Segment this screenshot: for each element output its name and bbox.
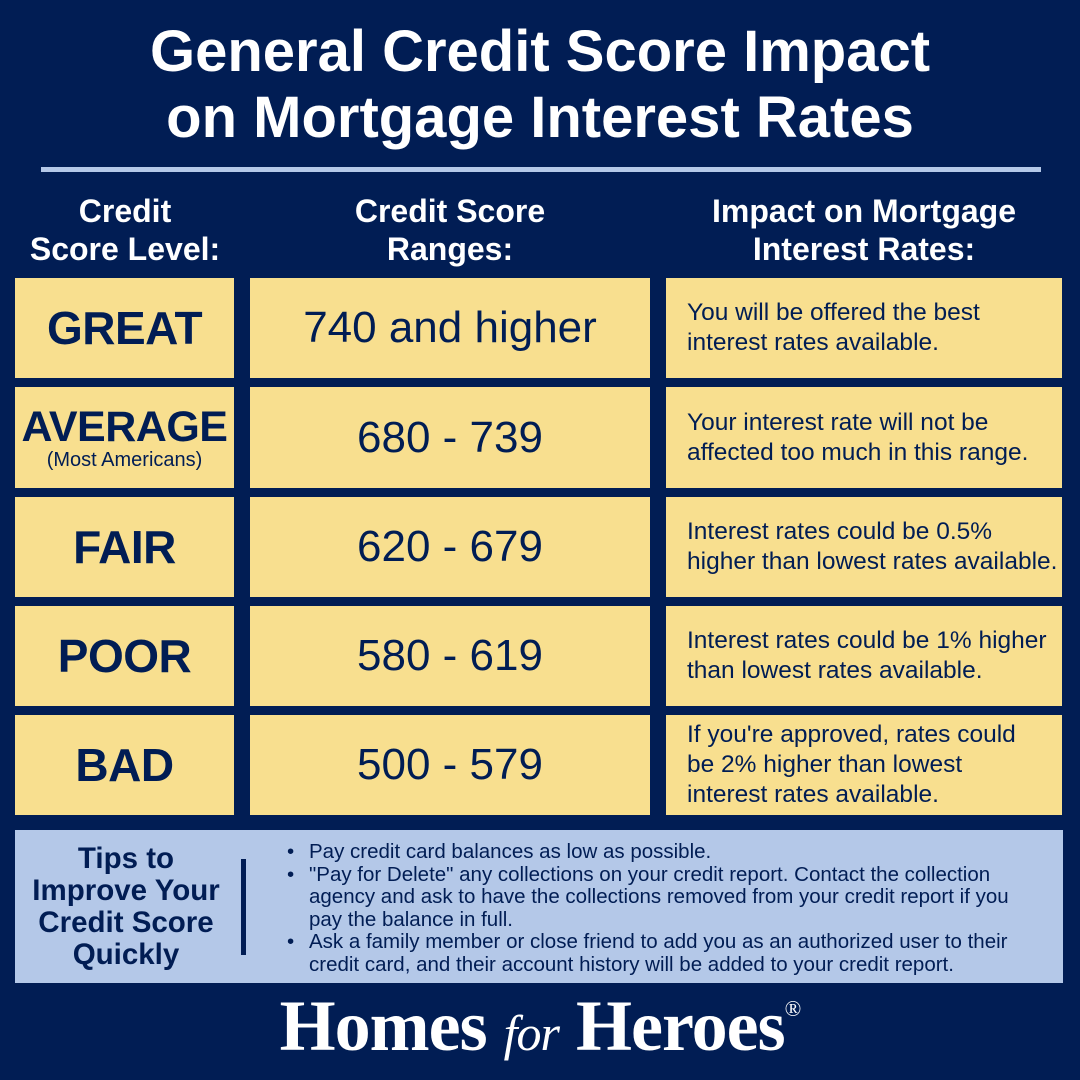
impact: Interest rates could be 1% higher xyxy=(687,627,1047,654)
level xyxy=(15,387,234,488)
header: impact xyxy=(712,193,1016,267)
row: average xyxy=(15,387,1062,488)
range xyxy=(250,387,650,488)
range xyxy=(250,497,650,597)
header: ranges xyxy=(355,193,545,267)
impact xyxy=(666,715,1062,815)
header: level: Credit xyxy=(79,193,171,229)
level: BAD xyxy=(75,739,174,791)
level xyxy=(15,497,234,597)
range: 740 and higher xyxy=(303,303,597,352)
range: 620 - 679 xyxy=(357,522,543,571)
impact xyxy=(666,278,1062,378)
row: great xyxy=(15,278,1062,378)
tips heading: Tips to xyxy=(78,842,174,875)
tips list: Pay credit card balances as low as possible. xyxy=(309,840,711,863)
range: 500 - 579 xyxy=(357,740,543,789)
impact: interest rates available. xyxy=(687,781,939,808)
impact xyxy=(666,387,1062,488)
tips list: "Pay for Delete" any collections on your credit report. Contact the collection agency and ask to have the collections removed from your credit report if you pay the balance in full. xyxy=(309,862,1009,930)
range: 580 - 619 xyxy=(357,631,543,680)
impact: higher than lowest rates available. xyxy=(687,548,1057,575)
impact: than lowest rates available. xyxy=(687,657,983,684)
header: level: Score Level: xyxy=(30,231,220,267)
tips heading: Credit Score xyxy=(38,906,214,939)
impact: Your interest rate will not be xyxy=(687,408,988,436)
header: impact: Impact on Mortgage xyxy=(712,193,1016,229)
level: GREAT xyxy=(47,302,202,354)
tips heading xyxy=(32,842,220,971)
row: poor xyxy=(15,606,1062,706)
range xyxy=(250,715,650,815)
logo: Homes for Heroes® xyxy=(280,986,800,1066)
row: bad xyxy=(15,715,1062,815)
title xyxy=(150,19,930,150)
panel: tips xyxy=(15,830,1063,983)
tips list: Ask a family member or close friend to add you as an authorized user to their credit card, and their account history will be added to your credit report. xyxy=(309,930,1007,976)
tips heading: Improve Your xyxy=(32,874,220,907)
header: ranges: Ranges: xyxy=(387,231,513,267)
impact: interest rates available. xyxy=(687,329,939,356)
title: on Mortgage Interest Rates xyxy=(166,85,914,150)
level xyxy=(15,606,234,706)
level: FAIR xyxy=(73,521,176,573)
level: AVERAGE xyxy=(22,402,227,450)
tips list: • xyxy=(287,862,294,886)
level: (Most Americans) xyxy=(47,448,202,470)
range: 680 - 739 xyxy=(357,412,543,462)
header: impact: Interest Rates: xyxy=(753,231,975,267)
level: POOR xyxy=(58,630,191,682)
tips list xyxy=(287,840,1009,976)
tips list: • xyxy=(287,840,294,863)
impact: If you're approved, rates could xyxy=(687,721,1016,748)
title: General Credit Score Impact xyxy=(150,19,930,84)
row: fair xyxy=(15,497,1062,597)
tips list: • xyxy=(287,930,294,953)
header: ranges: Credit Score xyxy=(355,193,545,229)
impact: Interest rates could be 0.5% xyxy=(687,518,992,545)
level xyxy=(15,278,234,378)
header: level xyxy=(30,193,220,267)
impact: affected too much in this range. xyxy=(687,438,1028,466)
range xyxy=(250,606,650,706)
range xyxy=(250,278,650,378)
level xyxy=(15,715,234,815)
impact: be 2% higher than lowest xyxy=(687,751,962,778)
impact: You will be offered the best xyxy=(687,299,980,326)
impact xyxy=(666,606,1062,706)
impact xyxy=(666,497,1062,597)
tips heading: Quickly xyxy=(73,938,179,971)
